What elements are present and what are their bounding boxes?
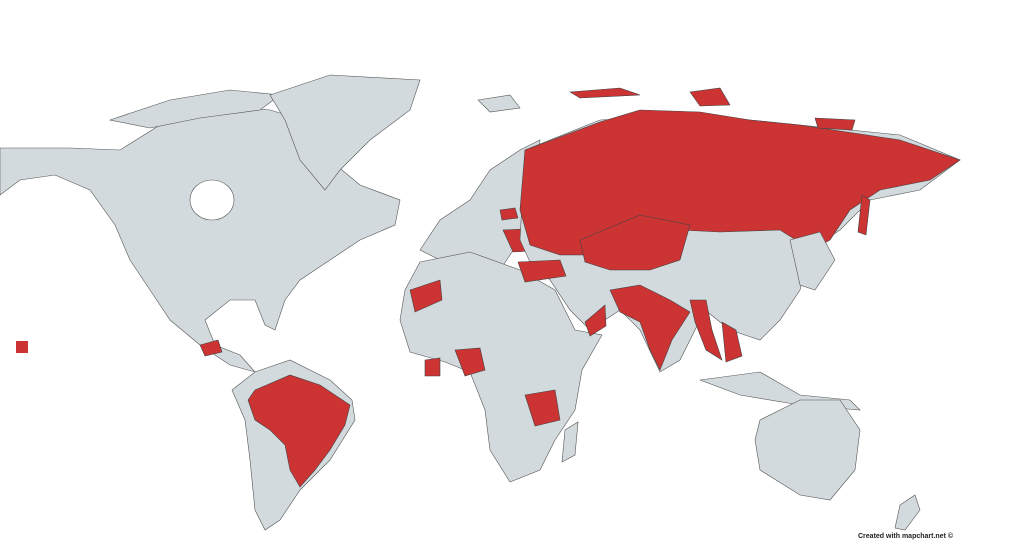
- continent: north america: [0, 90, 400, 372]
- continent: asia: [518, 88, 960, 410]
- continent: africa: [400, 252, 602, 482]
- legend square: [16, 341, 28, 353]
- continent: australia: [755, 400, 920, 530]
- credit text: Created with mapchart.net ©: [858, 532, 954, 540]
- continent: greenland: [270, 75, 420, 190]
- continent: europe: [420, 95, 550, 270]
- continent: south america: [232, 360, 355, 530]
